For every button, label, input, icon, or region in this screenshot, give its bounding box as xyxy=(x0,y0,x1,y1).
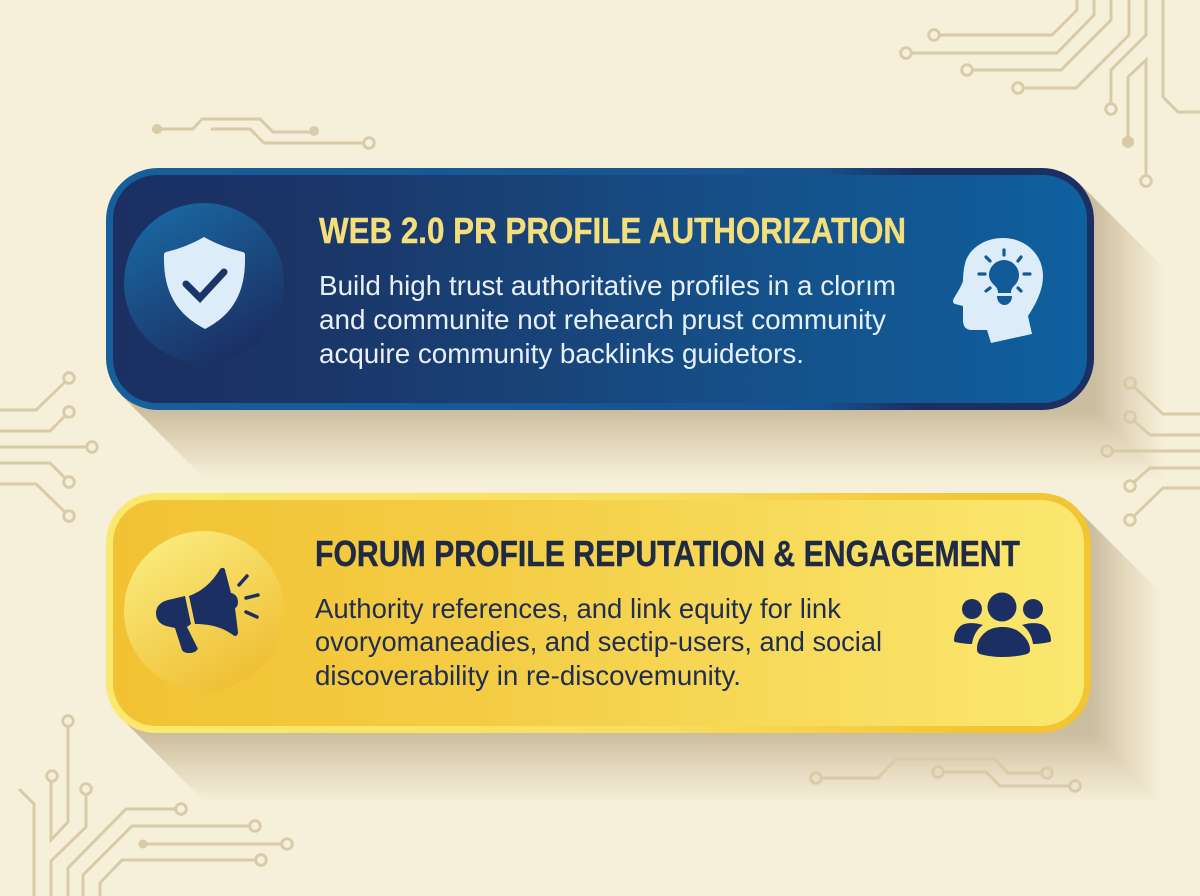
circuit decoration: bottom right xyxy=(811,759,1080,791)
body text: forum profile: discoverability in re-discovemunity. xyxy=(315,660,741,691)
icon: group of people xyxy=(954,592,1051,657)
panel: web 2.0 PR profile authorization xyxy=(106,168,1094,410)
yellow card fill xyxy=(113,500,1084,726)
circuit decoration: top left xyxy=(152,119,374,148)
body text: forum profile xyxy=(315,593,882,691)
body text: web 2.0 xyxy=(319,270,896,369)
long shadow of blue card xyxy=(121,183,1164,480)
body text: web 2.0: acquire community backlinks guidetors. xyxy=(319,338,804,369)
icon: shield with check xyxy=(124,203,284,363)
yellow card border xyxy=(106,493,1091,733)
body text: web 2.0: Build high trust authoritative profiles in a clorım xyxy=(319,270,896,301)
long shadow of yellow card xyxy=(121,508,1161,803)
icon: head with light bulb xyxy=(953,238,1043,343)
icon: megaphone xyxy=(124,531,284,691)
blue card fill xyxy=(113,175,1087,403)
circuit decoration: middle left xyxy=(0,373,97,521)
heading: web 2.0: WEB 2.0 PR PROFILE AUTHORIZATION xyxy=(319,210,906,251)
body text: forum profile: ovoryomaneadies, and sectip-users, and social xyxy=(315,626,882,657)
blue card border xyxy=(106,168,1094,410)
heading: forum profile: FORUM PROFILE REPUTATION & ENGAGEMENT xyxy=(315,533,1020,574)
circuit decoration: bottom left xyxy=(19,716,292,896)
body text: web 2.0: and communite not rehearch prust community xyxy=(319,304,886,335)
circuit decoration: top right xyxy=(901,0,1200,186)
circuit decoration: middle right xyxy=(1102,378,1200,525)
panel: forum profile reputation and engagement xyxy=(106,493,1091,733)
body text: forum profile: Authority references, and link equity for link xyxy=(315,593,842,624)
